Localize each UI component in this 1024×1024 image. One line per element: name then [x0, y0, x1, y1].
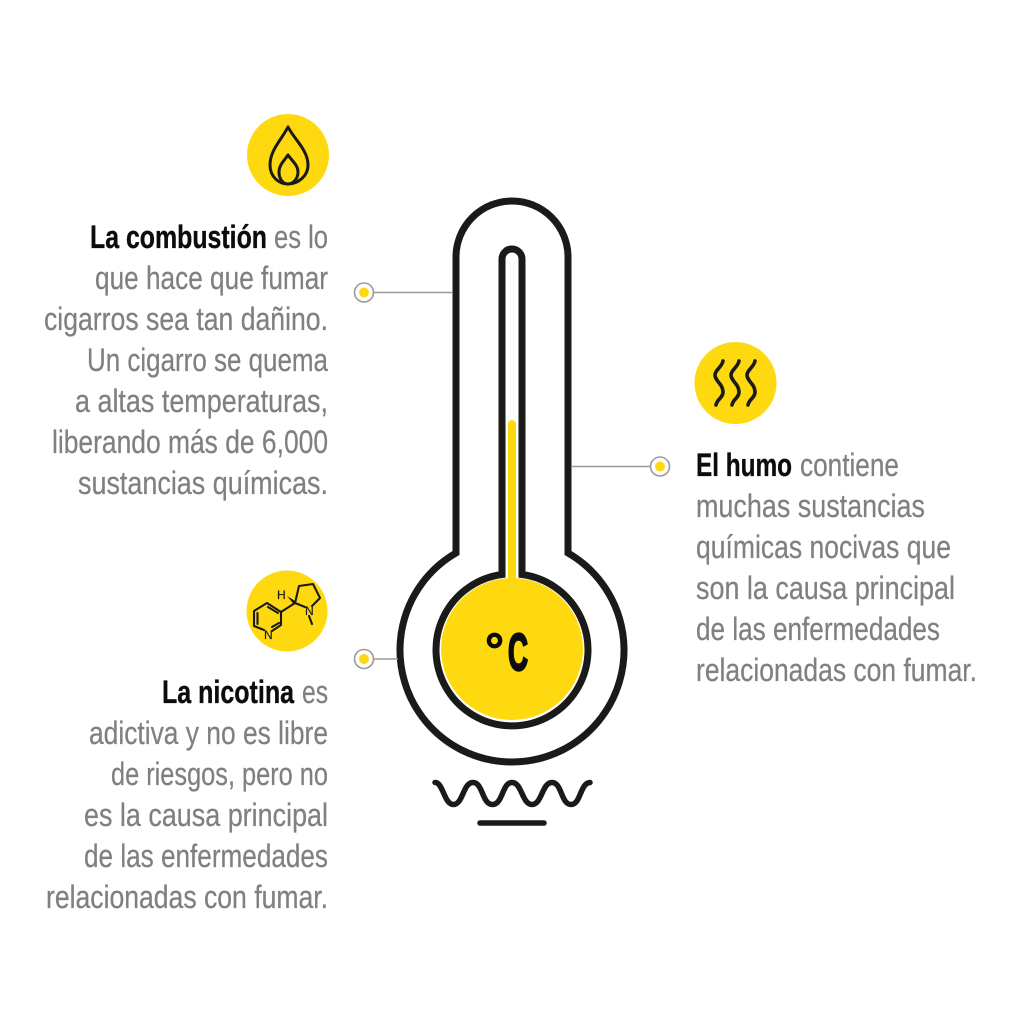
- text block: smoke: son la causa principal: [696, 570, 955, 606]
- degrees Celsius label: [485, 624, 528, 682]
- text block: smoke: [696, 447, 977, 688]
- icon: nicotine molecule: H: [277, 588, 286, 602]
- text block: combustion: Un cigarro se quema: [87, 342, 328, 378]
- thermometer inner tube and bulb: [436, 249, 588, 726]
- text block: combustion: [44, 219, 328, 501]
- icon: smoke waves: [694, 342, 776, 424]
- text block: smoke: contiene: [800, 447, 899, 483]
- icon: heat wave under thermometer: [435, 782, 590, 823]
- icon: flame: [247, 114, 329, 196]
- mercury bulb: [441, 578, 583, 720]
- callout marker: smoke: [571, 457, 670, 476]
- text block: smoke: muchas sustancias: [696, 488, 925, 524]
- mercury column: [508, 420, 516, 590]
- text block: smoke: El humo: [696, 447, 792, 483]
- text block: combustion: a altas temperaturas,: [75, 383, 328, 419]
- callout marker: nicotine: [354, 650, 398, 668]
- icon: nicotine molecule: [246, 570, 328, 652]
- text block: nicotine: relacionadas con fumar.: [46, 879, 328, 915]
- text block: nicotine: La nicotina: [162, 674, 294, 710]
- text block: nicotine: de las enfermedades: [84, 838, 328, 874]
- text block: combustion: que hace que fumar: [95, 260, 328, 296]
- degrees Celsius label: °: [485, 625, 504, 678]
- text block: combustion: liberando más de 6,000: [52, 424, 328, 460]
- thermometer: [400, 201, 624, 762]
- text block: nicotine: [46, 674, 328, 915]
- icon: nicotine molecule: N: [305, 604, 314, 618]
- text block: nicotine: de riesgos, pero no: [111, 756, 328, 792]
- text block: nicotine: adictiva y no es libre: [89, 715, 328, 751]
- text block: combustion: cigarros sea tan dañino.: [44, 301, 328, 337]
- text block: nicotine: es la causa principal: [84, 797, 328, 833]
- text block: combustion: sustancias químicas.: [78, 465, 328, 501]
- text block: combustion: La combustión: [90, 219, 267, 255]
- callout marker: combustion: [354, 283, 453, 302]
- icon: nicotine molecule: N: [264, 628, 273, 642]
- text block: nicotine: es: [302, 674, 328, 710]
- thermometer outer glass: [400, 201, 624, 762]
- text block: combustion: es lo: [274, 219, 328, 255]
- text block: smoke: químicas nocivas que: [696, 529, 951, 565]
- degrees Celsius label: C: [508, 624, 528, 682]
- text block: smoke: de las enfermedades: [696, 611, 940, 647]
